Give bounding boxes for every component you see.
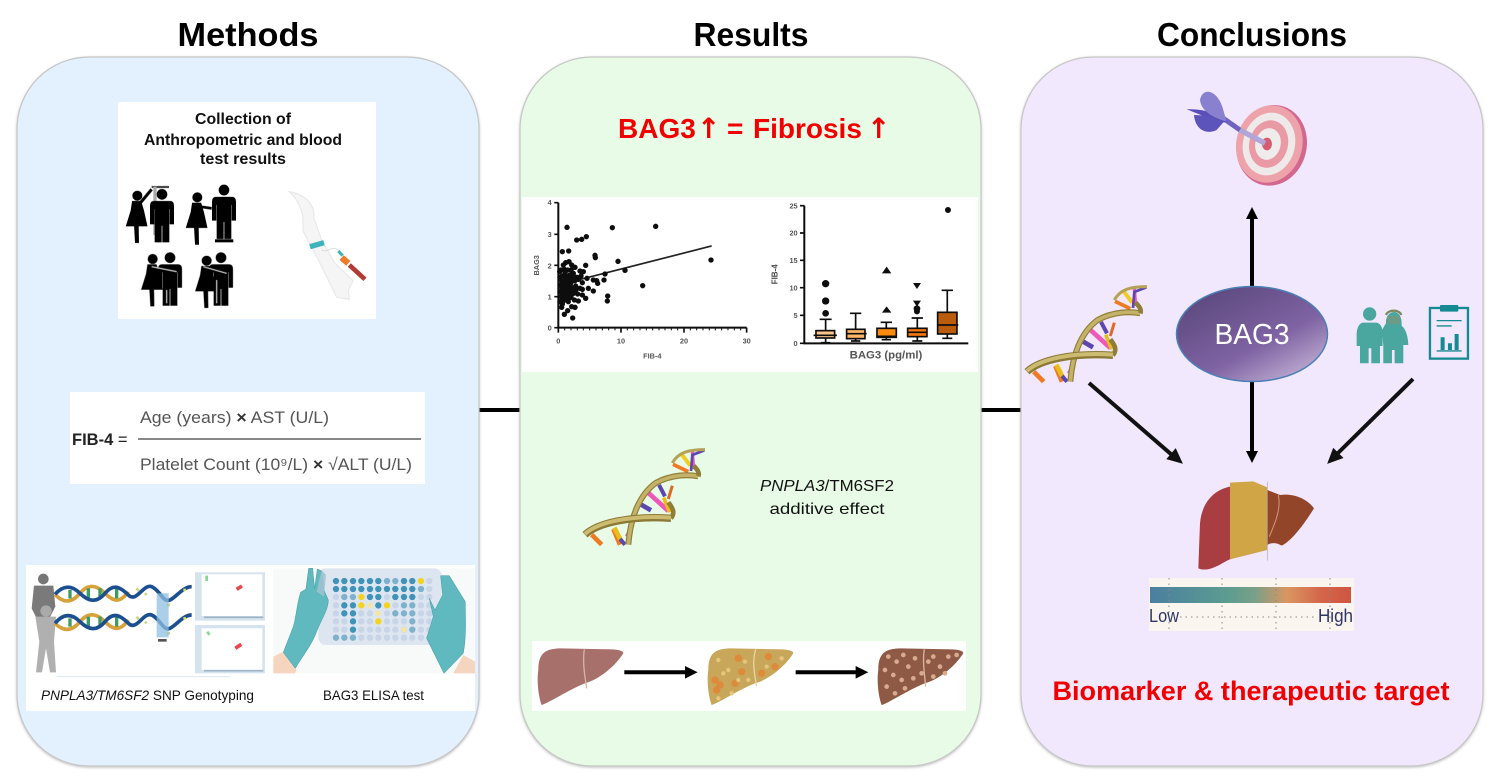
formula numerator: Age (years) × AST (U/L) — [140, 408, 329, 427]
arrow: patients to liver — [1328, 379, 1413, 463]
node: BAG3 — [1176, 286, 1328, 382]
heading: Conclusions: Conclusions — [1157, 16, 1347, 53]
card background — [118, 102, 376, 319]
icon: patients — [1357, 307, 1408, 363]
methods panel background — [17, 57, 479, 766]
shaft — [1337, 379, 1413, 454]
icon: people being measured — [127, 185, 235, 307]
scatter plot: BAG3 vs FIB-4 — [532, 198, 751, 360]
card: charts — [522, 197, 978, 372]
connector: methods to results — [478, 408, 521, 412]
scale label high: High — [1318, 606, 1353, 626]
scatter plot: BAG3 vs FIB-4: 1 — [548, 292, 552, 301]
liver stages illustration — [538, 648, 963, 705]
panel: results — [520, 57, 981, 766]
arrow: healthy to fatty — [624, 666, 698, 679]
card: genotyping and ELISA — [26, 565, 475, 711]
scatter plot: BAG3 vs FIB-4: 20 — [680, 336, 688, 345]
BAG3 label: BAG3 — [1214, 319, 1290, 351]
conclusion statement: Biomarker & therapeutic target — [1052, 676, 1450, 706]
illustration: liver stages composite — [1198, 481, 1314, 570]
fatty liver — [708, 648, 793, 705]
icon: arm blood draw — [289, 192, 365, 299]
box plot: FIB-4 by BAG3 quintile: 10 — [789, 283, 798, 292]
scatter plot: BAG3 vs FIB-4: FIB-4 — [643, 351, 662, 360]
scatter plot: BAG3 vs FIB-4: BAG3 — [532, 255, 541, 276]
box plot: FIB-4 by BAG3 quintile: 15 — [789, 256, 798, 265]
arrow: BAG3 to liver — [1246, 380, 1258, 463]
results headline: Fibrosis — [753, 113, 862, 144]
box plot: FIB-4 by BAG3 quintile — [771, 201, 968, 361]
scatter plot: BAG3 vs FIB-4: 3 — [548, 230, 552, 239]
shaft — [1089, 383, 1172, 455]
results headline: = — [727, 113, 743, 144]
fraction bar — [138, 438, 421, 440]
heat scale: low to high — [1149, 578, 1354, 631]
results headline: ↑ — [867, 112, 890, 145]
scatter plot: BAG3 vs FIB-4: 0 — [556, 336, 560, 345]
heading: Results: Results — [694, 16, 808, 53]
collection heading: test results — [200, 151, 286, 168]
icon: clipboard report — [1430, 305, 1468, 359]
box plot: FIB-4 by BAG3 quintile: FIB-4 — [771, 264, 780, 284]
scatter plot: BAG3 vs FIB-4: 0 — [548, 323, 552, 332]
card: FIB-4 formula — [70, 392, 425, 484]
illustration: SNP genotyping — [32, 572, 265, 677]
panel: conclusions — [1021, 57, 1483, 766]
label: ELISA test: BAG3 ELISA test — [323, 687, 424, 703]
box plot: FIB-4 by BAG3 quintile: 20 — [789, 229, 798, 238]
card: anthropometric and blood collection — [118, 102, 376, 319]
head — [1328, 449, 1343, 463]
scatter plot: BAG3 vs FIB-4: 2 — [548, 261, 552, 270]
BAG3 ellipse — [1176, 286, 1328, 382]
scatter plot: BAG3 vs FIB-4: 4 — [548, 198, 553, 207]
box plot: FIB-4 by BAG3 quintile: 0 — [794, 339, 798, 348]
scale gridlines — [1169, 578, 1330, 631]
label: additive effect: PNPLA3/TM6SF2 — [760, 478, 890, 495]
conclusions panel background — [1021, 57, 1483, 766]
icon: DNA helix — [1027, 287, 1147, 382]
results headline: BAG3 — [618, 113, 696, 144]
formula label: FIB-4 = — [72, 431, 127, 449]
icon: DNA helix — [585, 450, 705, 545]
icon: dart and target — [1187, 92, 1315, 193]
scale gradient bar — [1150, 587, 1351, 603]
cirrhotic liver — [878, 648, 963, 705]
scatter plot: BAG3 vs FIB-4: 30 — [743, 336, 751, 345]
label: additive effect: additive effect — [770, 501, 885, 518]
box plot: FIB-4 by BAG3 quintile: 5 — [794, 311, 798, 320]
heading: Methods: Methods — [178, 16, 318, 53]
panel: methods — [17, 57, 479, 766]
charts background — [522, 197, 978, 372]
arrow: BAG3 to target — [1246, 207, 1258, 288]
results headline: ↑ — [697, 112, 720, 145]
box plot: FIB-4 by BAG3 quintile: 25 — [789, 201, 798, 210]
collection heading: Anthropometric and blood — [144, 132, 342, 149]
card background — [26, 565, 475, 711]
connector: results to conclusions — [980, 408, 1023, 412]
formula background — [70, 392, 425, 484]
results panel background — [520, 57, 981, 766]
scale background — [1149, 578, 1354, 631]
label: SNP genotyping: PNPLA3/TM6SF2 SNP Genotyping — [41, 687, 254, 703]
liver card background — [532, 641, 966, 711]
head — [1167, 449, 1182, 463]
collection heading: Collection of — [195, 111, 292, 128]
scale label low: Low — [1149, 606, 1180, 626]
scatter plot: BAG3 vs FIB-4: 10 — [617, 336, 625, 345]
formula denominator: Platelet Count (10⁹/L) × √ALT (U/L) — [140, 455, 412, 474]
box plot: FIB-4 by BAG3 quintile: BAG3 (pg/ml) — [850, 349, 923, 361]
illustration: ELISA plate and gloved hands — [273, 568, 475, 673]
card: liver progression — [532, 641, 966, 711]
arrow: DNA to liver — [1089, 383, 1182, 463]
arrow: fatty to cirrhotic — [796, 666, 868, 679]
healthy liver — [538, 648, 623, 705]
